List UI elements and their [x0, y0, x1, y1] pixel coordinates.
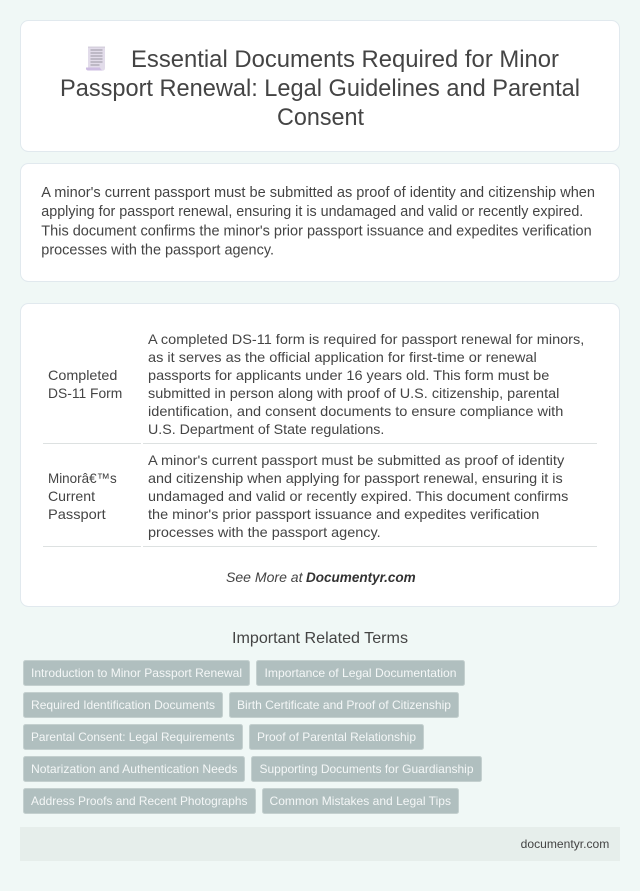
summary text: This document confirms the minor's prior passport issuance and expedites verification: [41, 224, 592, 240]
row description: current passport: [148, 452, 568, 540]
row label: Minor's Current Passport: [48, 470, 117, 522]
row description: DS-11 form: U.S. Department of State regulations.: [148, 421, 384, 437]
row: completed DS-11 form: [43, 331, 597, 444]
row description: DS-11 form: as it serves as the official application for first-time or renewal: [148, 349, 537, 365]
tag: Required Identification Documents: [31, 698, 215, 712]
summary text: A minor's current passport must be submitted as proof of identity and citizenship when: [41, 185, 595, 201]
panel: summary: [20, 164, 620, 282]
tag: [24, 788, 256, 814]
tag: [250, 724, 424, 750]
tag: Address Proofs and Recent Photographs: [31, 794, 248, 808]
summary text: processes with the passport agency.: [41, 242, 274, 258]
row description: current passport: A minor's current passport must be submitted as proof of identity: [148, 452, 564, 468]
tag: [24, 756, 244, 782]
see more link: Documentyr.com: [306, 569, 416, 585]
tag: [24, 692, 222, 718]
tag: Parental Consent: Legal Requirements: [31, 730, 234, 744]
row label: Completed DS-11 Form: [48, 367, 122, 401]
tag: Introduction to Minor Passport Renewal: [31, 666, 242, 680]
title: Essential Documents Required for Minor: [131, 46, 559, 73]
row description: DS-11 form: passports for applicants under 16 years old. This form must be: [148, 367, 550, 383]
panel: document table: [20, 304, 620, 606]
tag: Common Mistakes and Legal Tips: [270, 794, 451, 808]
summary text: applying for passport renewal, ensuring it is undamaged and valid or recently expired.: [41, 204, 583, 220]
row label: Minor's Current Passport: Passport: [48, 506, 106, 522]
row description: current passport: the minor's prior passport issuance and expedites verification: [148, 506, 539, 522]
tag: [24, 724, 242, 750]
row description: DS-11 form: identification, and consent documents to ensure compliance with: [148, 403, 563, 419]
heading: important related terms: Important Related Terms: [232, 630, 408, 647]
tag: Birth Certificate and Proof of Citizenship: [237, 698, 451, 712]
panel: title card: [20, 20, 620, 152]
summary text: [41, 185, 595, 258]
title: Consent: [277, 104, 364, 131]
see more link: See More at: [226, 569, 304, 585]
row label: Minor's Current Passport: Minorâ€™s: [48, 470, 117, 486]
row description: current passport: processes with the passport agency.: [148, 524, 381, 540]
row: minor's current passport: [43, 452, 597, 547]
tag: [262, 788, 458, 814]
row description: DS-11 form: submitted in person along with proof of U.S. citizenship, parental: [148, 385, 559, 401]
see more link: [226, 569, 416, 585]
row description: DS-11 form: A completed DS-11 form is required for passport renewal for minors,: [148, 331, 584, 347]
footer: [20, 827, 620, 861]
tag: Notarization and Authentication Needs: [31, 762, 238, 776]
row label: Minor's Current Passport: Current: [48, 488, 95, 504]
tag: [252, 756, 482, 782]
related term tags: [24, 660, 482, 814]
row label: Completed DS-11 Form: Completed: [48, 367, 117, 383]
row description: current passport: and citizenship when applying for passport renewal, ensuring it is: [148, 470, 563, 486]
tag: [24, 660, 250, 686]
title: [60, 46, 580, 131]
row description: current passport: undamaged and valid or recently expired. This document confirms: [148, 488, 568, 504]
row description: DS-11 form: [148, 331, 584, 437]
title: Passport Renewal: Legal Guidelines and Parental: [60, 75, 580, 102]
tag: [256, 660, 464, 686]
row label: Completed DS-11 Form: DS-11 Form: [48, 385, 122, 401]
tag: Proof of Parental Relationship: [257, 730, 416, 744]
icon: document scroll: [86, 46, 105, 70]
tag: Supporting Documents for Guardianship: [260, 762, 474, 776]
tag: [230, 692, 458, 718]
footer: documentyr.com: [521, 837, 609, 851]
tag: Importance of Legal Documentation: [264, 666, 456, 680]
